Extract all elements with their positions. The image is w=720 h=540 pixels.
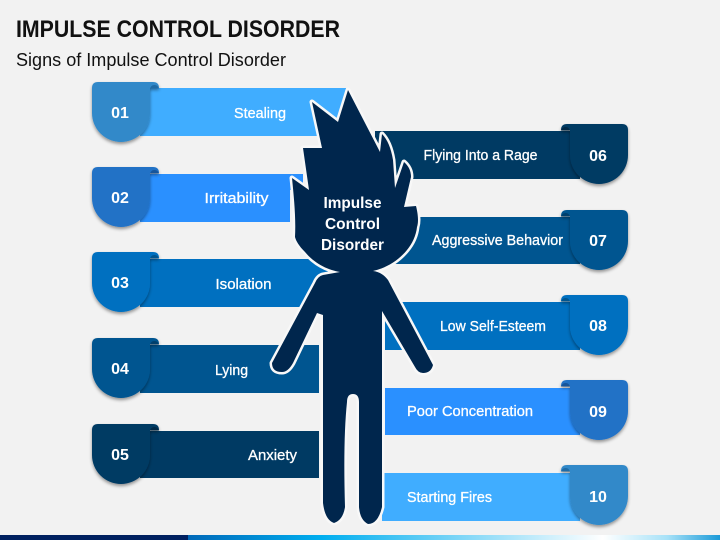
right bar 07: Aggressive Behavior <box>395 217 580 264</box>
badge 06 <box>561 124 628 184</box>
label: Isolation: Isolation <box>216 277 272 293</box>
right bar 06: Flying Into a Rage <box>375 131 580 179</box>
label: Starting Fires: Starting Fires <box>407 490 492 506</box>
badge 03 <box>92 252 159 312</box>
numbers 06 to 10: 10 <box>589 489 607 506</box>
right bar 09: Poor Concentration <box>385 388 580 435</box>
label: Low Self-Esteem: Low Self-Esteem <box>440 319 546 335</box>
numbers 01 to 05: 02 <box>111 190 129 207</box>
figure label: Disorder <box>321 237 384 254</box>
left bar 01: Stealing <box>140 88 346 136</box>
figure label: Impulse <box>324 195 382 212</box>
badge 07 <box>561 210 628 270</box>
label: Flying Into a Rage: Flying Into a Rage <box>424 148 538 164</box>
badge 05 <box>92 424 159 484</box>
subtitle: Signs of Impulse Control Disorder <box>16 50 286 70</box>
numbers 01 to 05: 04 <box>111 361 129 378</box>
numbers 01 to 05: 01 <box>111 105 129 122</box>
badge 01 <box>92 82 159 142</box>
right bar 08: Low Self-Esteem <box>385 302 580 350</box>
numbers 01 to 05: 05 <box>111 447 129 464</box>
figure label: Control <box>325 216 380 233</box>
label: Poor Concentration: Poor Concentration <box>407 404 533 420</box>
figure: human silhouette with flame head <box>272 90 433 524</box>
badge 08 <box>561 295 628 355</box>
left bar 03: Isolation <box>140 259 330 307</box>
numbers 01 to 05 <box>111 105 129 464</box>
label: Lying: Lying <box>215 363 248 379</box>
left bar 05: Anxiety <box>140 431 319 478</box>
left bar 04: Lying <box>140 345 319 393</box>
numbers 06 to 10: 06 <box>589 148 607 165</box>
right bar 10: Starting Fires <box>382 473 580 521</box>
badge 09 <box>561 380 628 440</box>
numbers 06 to 10: 07 <box>589 233 607 250</box>
label: Stealing: Stealing <box>234 106 286 122</box>
badge 10 <box>561 465 628 525</box>
numbers 06 to 10: 08 <box>589 318 607 335</box>
badge 02 <box>92 167 159 227</box>
label: Aggressive Behavior: Aggressive Behavior <box>432 233 563 249</box>
label: Irritability: Irritability <box>204 191 269 207</box>
label: Anxiety: Anxiety <box>248 448 298 464</box>
numbers 06 to 10: 09 <box>589 404 607 421</box>
badge 04 <box>92 338 159 398</box>
title: IMPULSE CONTROL DISORDER <box>16 16 340 43</box>
numbers 01 to 05: 03 <box>111 275 129 292</box>
footer band <box>0 535 720 540</box>
numbers 06 to 10 <box>589 148 607 506</box>
left bar 02: Irritability <box>140 174 303 222</box>
